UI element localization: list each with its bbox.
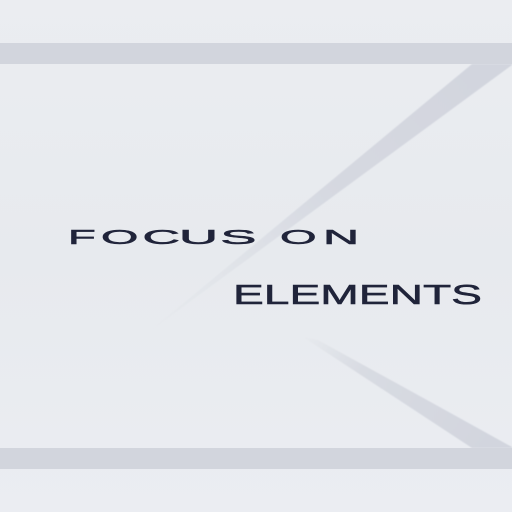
bottom bar [0,448,512,469]
heading: focus on: O [280,226,317,248]
heading: focus on: C [142,226,180,249]
heading: focus on [68,226,359,249]
heading: elements: ELEMENTS [233,279,482,310]
bottom diagonal stripe [303,337,512,448]
heading: focus on: S [220,226,256,248]
heading: focus on: O [101,226,138,248]
heading: focus on: N [323,227,359,249]
heading: focus on: F [68,226,96,249]
heading: focus on: U [179,226,218,248]
top diagonal stripe [150,64,512,331]
top bar [0,43,512,64]
